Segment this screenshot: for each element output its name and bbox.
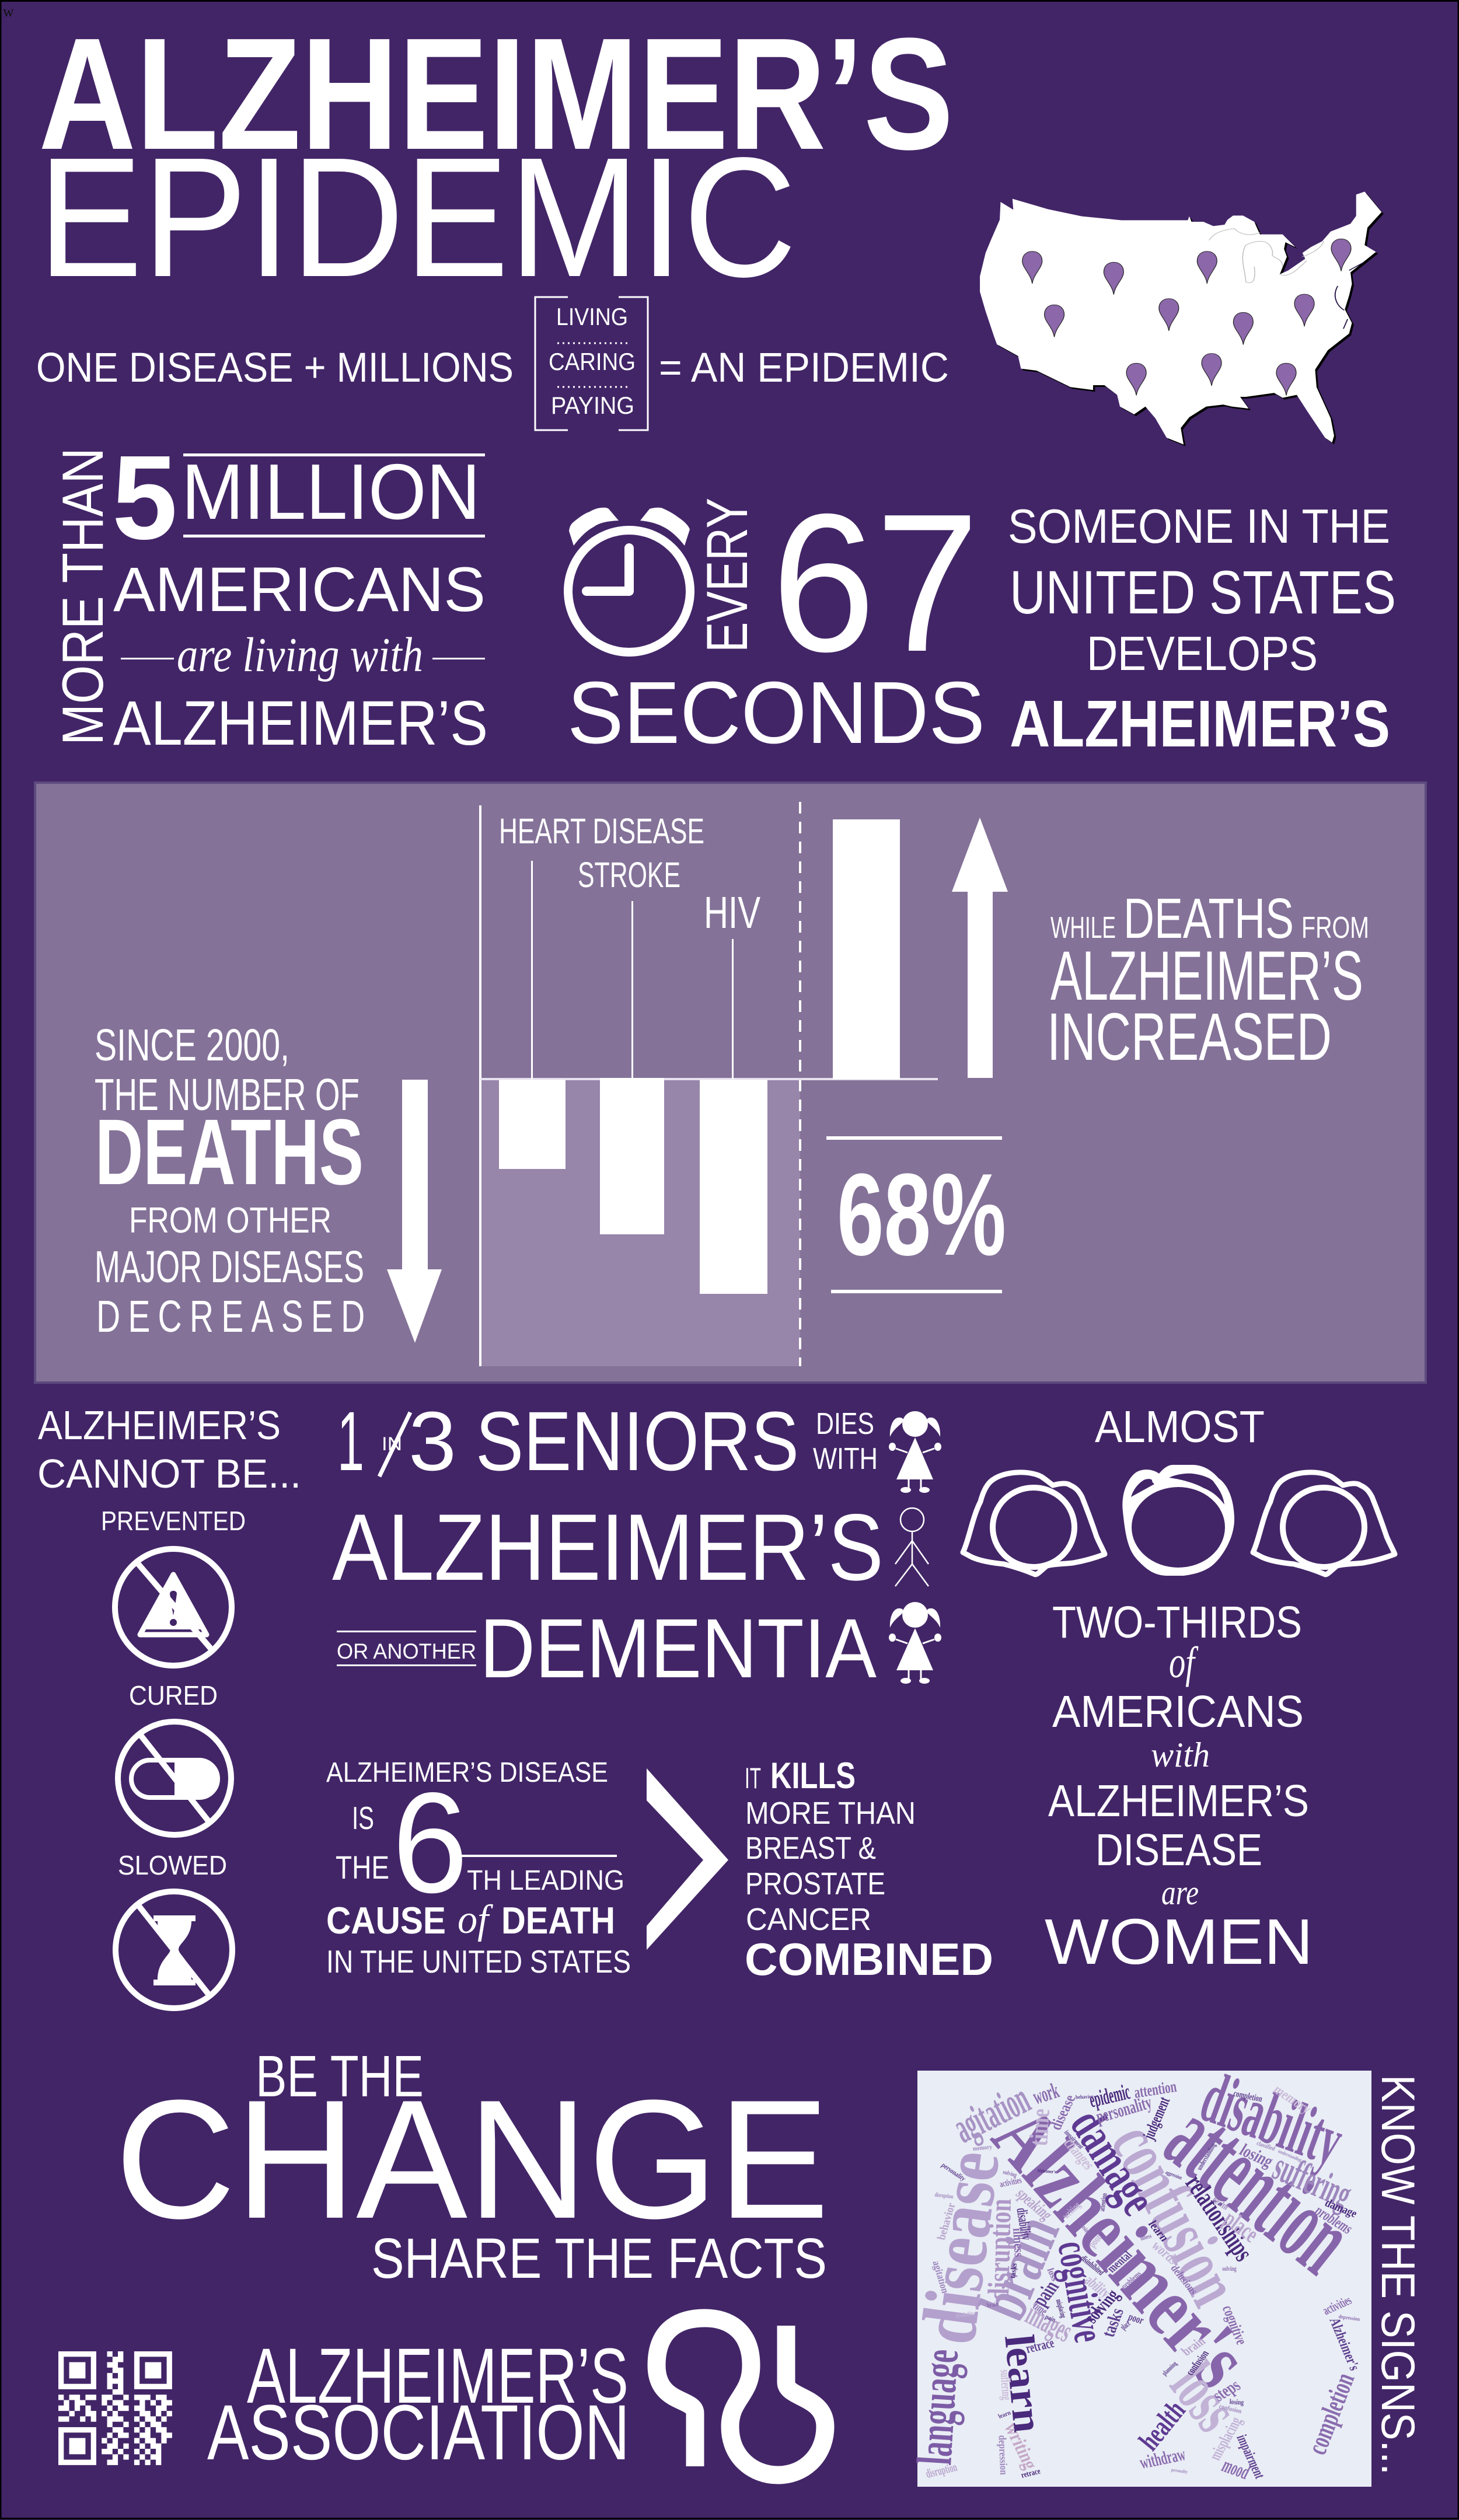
word cloud: small words: understanding xyxy=(1277,2148,1303,2163)
word cloud: elephant shape, large words: work xyxy=(1030,2078,1062,2110)
word cloud: small words: solving xyxy=(1080,2286,1124,2327)
word cloud: small words: behavior xyxy=(935,2202,958,2241)
panel: two-thirds are women: with xyxy=(1151,1736,1210,1774)
word cloud: elephant shape, large words: epidemic xyxy=(1087,2079,1132,2113)
word cloud: elephant shape, large words: Alzheimer's xyxy=(975,2088,1268,2405)
icon: girl figure xyxy=(889,1602,941,1684)
icon: woman head right xyxy=(1253,1472,1395,1575)
header panel xyxy=(36,5,1384,446)
word cloud: small words: delusions xyxy=(1076,2219,1093,2237)
text: deaths from other major diseases decreased: FROM OTHER xyxy=(129,1200,331,1241)
panel: be the change: BE THE xyxy=(256,2044,424,2109)
word cloud: small words: illness xyxy=(1010,2228,1027,2257)
word cloud: small words: retrace xyxy=(1020,2466,1042,2480)
word cloud: small words: loss xyxy=(1045,2267,1060,2282)
word cloud: small words: writing xyxy=(1000,2420,1042,2472)
text: deaths from other major diseases decreased: SINCE 2000, xyxy=(95,1020,289,1070)
word cloud: small words: speaking xyxy=(1012,2186,1056,2224)
word cloud: elephant shape, large words: images xyxy=(1020,2296,1078,2349)
word cloud: small words: writing xyxy=(1060,2200,1083,2221)
word cloud: small words: poor xyxy=(1085,2232,1105,2250)
text: while deaths from Alzheimer's increased: INCREASED xyxy=(1047,1000,1332,1074)
text: kills more than breast and prostate cancer combined: COMBINED xyxy=(745,1933,993,1985)
word cloud: small words: impairment xyxy=(1233,2433,1268,2480)
word cloud: small words: problems xyxy=(1119,2270,1143,2290)
word cloud: small words: Alzheimer's xyxy=(1037,2168,1056,2175)
text: w xyxy=(3,3,14,20)
word cloud: small words: losing xyxy=(1229,2397,1244,2406)
word cloud: small words: solving xyxy=(1222,2265,1237,2273)
word cloud: small words: words xyxy=(1148,2238,1182,2267)
icon: woman head centre xyxy=(1122,1465,1234,1576)
panel: be the change: CHANGE xyxy=(115,2065,829,2254)
word cloud: elephant shape, large words: damage xyxy=(1059,2099,1167,2225)
panel: 1 in 3 seniors: OR ANOTHER xyxy=(337,1639,476,1663)
text: deaths from other major diseases decreased: MAJOR DISEASES xyxy=(95,1242,364,1292)
word cloud: elephant shape, large words: judgement xyxy=(1140,2094,1174,2142)
word cloud: small words: aggression xyxy=(1164,2170,1183,2181)
word cloud: small words: problems xyxy=(1311,2203,1356,2237)
stat: more than 5 million Americans: MILLION xyxy=(181,448,480,536)
word cloud: small words: confusion xyxy=(1218,2402,1243,2415)
equation: one disease plus millions equals an epidemic: = AN EPIDEMIC xyxy=(659,345,949,391)
panel: 1 in 3 seniors: DEMENTIA xyxy=(480,1601,877,1695)
word cloud: small words: personality xyxy=(940,2161,968,2183)
panel: be the change: SHARE THE FACTS xyxy=(371,2226,827,2290)
equation: one disease plus millions equals an epidemic: PAYING xyxy=(551,392,634,419)
icon: girl figure xyxy=(889,1411,941,1493)
word cloud: small words: disruption xyxy=(934,2191,954,2200)
word cloud: small words: classified xyxy=(1255,2140,1276,2152)
text: while deaths from Alzheimer's increased: DEATHS xyxy=(1123,886,1294,950)
word cloud: small words: agitation xyxy=(930,2260,951,2294)
word cloud: small words: poor xyxy=(1126,2311,1146,2327)
word cloud: small words: delusions xyxy=(1168,2263,1200,2296)
panel: 6th leading cause of death: ALZHEIMER’S DISEASE xyxy=(326,1757,608,1788)
word cloud: elephant shape, large words: agitation xyxy=(945,2074,1037,2152)
panel: two-thirds are women xyxy=(963,1402,1395,1978)
icon: no warning sign xyxy=(115,1549,232,1666)
word cloud panel xyxy=(905,2057,1375,2487)
bar chart: HIV xyxy=(704,888,760,938)
word cloud: small words: disruption xyxy=(924,2460,959,2480)
word cloud: elephant shape, large words: brain xyxy=(965,2205,1073,2330)
word cloud: elephant shape, large words: disruption xyxy=(982,2198,1018,2301)
word cloud: small words: time xyxy=(1030,2301,1050,2317)
stat: 68 percent xyxy=(826,1136,1006,1293)
panel: two-thirds are women: are xyxy=(1161,1873,1199,1912)
equation: one disease plus millions equals an epidemic: ONE DISEASE + MILLIONS xyxy=(36,345,514,391)
panel: two-thirds are women: ALMOST xyxy=(1095,1402,1265,1452)
word cloud: elephant shape, large words xyxy=(905,2057,1375,2466)
word cloud: elephant shape, large words: health xyxy=(1132,2394,1192,2456)
stat: every 67 seconds: ALZHEIMER’S xyxy=(1010,687,1390,760)
word cloud: small words: retrace xyxy=(1024,2335,1056,2356)
word cloud: small words: misplacing xyxy=(1205,2414,1245,2463)
word cloud: elephant shape, large words: attention xyxy=(1133,2078,1178,2102)
word cloud: small words: pain xyxy=(1027,2277,1064,2310)
panel: Alzheimer's cannot be prevented, cured, slowed: CANNOT BE... xyxy=(37,1451,301,1496)
icon: greater-than chevron xyxy=(647,1768,728,1950)
stat: more than 5 million Americans: ALZHEIMER’S xyxy=(113,687,488,758)
panel: 1 in 3 seniors: SENIORS xyxy=(476,1394,799,1488)
stat: more than 5 million Americans xyxy=(50,431,488,758)
word cloud: elephant shape, large words: suffering xyxy=(1267,2144,1358,2217)
word cloud: elephant shape, large words: loss xyxy=(1157,2350,1254,2444)
word cloud: small words: withdraw xyxy=(1137,2445,1188,2473)
Alzheimer's Association wordmark xyxy=(207,2333,630,2476)
word cloud: small words: brain xyxy=(986,2300,999,2309)
stat: every 67 seconds: SECONDS xyxy=(567,663,985,762)
panel: 6th leading cause of death xyxy=(326,1755,993,1985)
word cloud: small words: activities xyxy=(1320,2294,1355,2318)
bar chart: HEART DISEASE xyxy=(499,811,704,851)
arrow: up xyxy=(952,818,1008,1078)
word cloud: elephant shape, large words: time xyxy=(1024,2108,1055,2147)
text: while deaths from Alzheimer's increased: WHILE xyxy=(1050,911,1116,945)
word cloud: elephant shape, large words: confusion xyxy=(1096,2111,1255,2317)
text: kills more than breast and prostate cancer combined xyxy=(745,1755,993,1985)
word cloud: elephant shape, large words: language xyxy=(907,2348,969,2466)
text: kills more than breast and prostate cancer combined: KILLS xyxy=(770,1755,856,1796)
word cloud: small words: place xyxy=(1118,2319,1133,2332)
icon: stick figure xyxy=(895,1508,929,1586)
word cloud: small words: impairment xyxy=(1062,2128,1085,2150)
word cloud: small words: memory xyxy=(1270,2082,1315,2117)
Alzheimer's Association wordmark: ALZHEIMER’S xyxy=(247,2333,629,2420)
panel: Alzheimer's cannot be prevented, cured, slowed: PREVENTED xyxy=(101,1506,246,1536)
word cloud: small words: depression xyxy=(1338,2314,1360,2323)
word cloud: small words: tasks xyxy=(1008,2263,1018,2279)
panel: 1 in 3 seniors: WITH xyxy=(813,1442,878,1476)
panel: 1 in 3 seniors: 1 xyxy=(337,1394,364,1488)
stat: more than 5 million Americans: AMERICANS xyxy=(113,554,486,624)
word cloud: small words: learn xyxy=(997,2409,1012,2420)
word cloud: small words: confusion xyxy=(1184,2348,1212,2378)
word cloud: small words: ability xyxy=(1081,2272,1115,2301)
bar chart xyxy=(479,802,938,1366)
title xyxy=(38,5,954,312)
word cloud: small words: attention xyxy=(1097,2193,1109,2212)
panel: deaths chart xyxy=(35,783,1426,1383)
title: ALZHEIMER’S xyxy=(39,5,954,183)
text: deaths from other major diseases decreased: THE NUMBER OF xyxy=(95,1070,359,1120)
text: kills more than breast and prostate cancer combined: CANCER xyxy=(746,1902,871,1937)
word cloud: elephant shape, large words: personality xyxy=(1094,2091,1154,2127)
equation: one disease plus millions equals an epidemic: CARING xyxy=(549,348,636,375)
panel: 6th leading cause of death: CAUSE xyxy=(326,1899,446,1942)
QR code xyxy=(58,2354,172,2462)
icon: alarm clock xyxy=(568,508,690,652)
text: kills more than breast and prostate cancer combined: IT xyxy=(745,1762,761,1795)
word cloud: small words: activities xyxy=(999,2175,1023,2189)
panel: 1 in 3 seniors xyxy=(332,1394,941,1695)
word cloud: elephant shape, large words: place xyxy=(1219,2205,1263,2248)
panel: Alzheimer's cannot be prevented, cured, slowed: ALZHEIMER’S xyxy=(38,1402,281,1448)
word cloud: small words: cognitive xyxy=(1219,2303,1251,2347)
text: kills more than breast and prostate cancer combined: PROSTATE xyxy=(745,1866,885,1901)
text: kills more than breast and prostate cancer combined: BREAST & xyxy=(745,1831,876,1866)
word cloud: small words: disability xyxy=(955,2309,976,2320)
word cloud: small words: health xyxy=(1210,2196,1231,2212)
text: deaths from other major diseases decreased xyxy=(95,1020,365,1342)
word cloud: small words: tasks xyxy=(1098,2306,1128,2339)
panel: 6th leading cause of death: of xyxy=(458,1897,493,1942)
word cloud: small words: changes xyxy=(1060,2135,1099,2172)
stat: 68 percent: 68% xyxy=(837,1150,1006,1280)
map of the United States with pins xyxy=(980,191,1384,446)
word cloud: small words: mental xyxy=(1104,2249,1135,2275)
word cloud: small words: steps xyxy=(1209,2376,1245,2405)
text: deaths from other major diseases decreased: DECREASED xyxy=(96,1292,365,1342)
panel: two-thirds are women: ALZHEIMER’S xyxy=(1048,1776,1309,1826)
panel: Alzheimer's cannot be prevented, cured, slowed xyxy=(37,1402,301,2008)
title: EPIDEMIC xyxy=(38,122,797,312)
word cloud: elephant shape, large words: cognitive xyxy=(1048,2238,1114,2346)
icon: woman head left xyxy=(963,1472,1105,1575)
word cloud: elephant shape, large words: disease xyxy=(905,2146,1017,2349)
word cloud: elephant shape, large words: completion xyxy=(1301,2369,1360,2459)
panel: 6th leading cause of death: DEATH xyxy=(501,1899,615,1942)
panel: two-thirds are women: AMERICANS xyxy=(1052,1687,1304,1737)
panel: two-thirds are women: DISEASE xyxy=(1095,1825,1262,1875)
word cloud: small words xyxy=(924,2082,1363,2484)
panel: two-thirds are women: WOMEN xyxy=(1045,1906,1313,1978)
word cloud: small words: personality xyxy=(1171,2467,1188,2474)
word cloud: small words: disinhibited xyxy=(1078,2254,1107,2277)
word cloud: small words: losing xyxy=(1236,2141,1277,2171)
panel: 6th leading cause of death: THE xyxy=(336,1849,389,1886)
word cloud: small words: planning xyxy=(1160,2360,1179,2377)
stat: every 67 seconds: 67 xyxy=(772,473,979,693)
panel: Alzheimer's cannot be prevented, cured, slowed: SLOWED xyxy=(118,1850,227,1880)
word cloud: small words: completion xyxy=(1233,2088,1264,2104)
word cloud: elephant shape, large words: relationships xyxy=(1179,2169,1259,2267)
panel: 6th leading cause of death: 6 xyxy=(392,1762,468,1922)
word cloud: small words: damage xyxy=(1322,2196,1360,2220)
stat: every 67 seconds xyxy=(567,473,1396,762)
word cloud: small words: understanding xyxy=(1195,2142,1218,2171)
equation: one disease plus millions equals an epidemic xyxy=(36,297,949,430)
word cloud: small words: suffering xyxy=(997,2369,1014,2400)
word cloud: small words: mood xyxy=(1218,2454,1254,2484)
panel: 1 in 3 seniors: ALZHEIMER’S xyxy=(332,1495,884,1600)
stat: every 67 seconds: DEVELOPS xyxy=(1087,626,1318,680)
word cloud: small words: depression xyxy=(996,2435,1010,2475)
equation: one disease plus millions equals an epidemic: LIVING xyxy=(556,303,628,330)
bar chart: STROKE xyxy=(578,855,680,895)
panel: 1 in 3 seniors: IN xyxy=(382,1433,402,1454)
word cloud: small words: illness xyxy=(1139,2232,1153,2242)
text: while deaths from Alzheimer's increased: FROM xyxy=(1301,911,1369,945)
vertical label: know the signs: KNOW THE SIGNS... xyxy=(1371,2075,1424,2475)
stat: every 67 seconds: SOMEONE IN THE xyxy=(1008,499,1390,553)
panel: 1 in 3 seniors: 3 xyxy=(409,1394,456,1488)
word cloud: small words: behavior xyxy=(1076,2094,1094,2100)
stat: more than 5 million Americans: are living with xyxy=(177,628,423,682)
icon: Alzheimer's Association logo xyxy=(657,2318,825,2475)
panel: two-thirds are women: TWO-THIRDS xyxy=(1052,1597,1302,1648)
text: deaths from other major diseases decreased: DEATHS xyxy=(95,1100,364,1204)
panel: two-thirds are women: of xyxy=(1169,1638,1199,1687)
icon: no hourglass xyxy=(116,1891,232,2008)
word cloud: small words: brain xyxy=(1178,2334,1209,2359)
text: while deaths from Alzheimer's increased xyxy=(1047,886,1369,1074)
stat: more than 5 million Americans: MORE THAN xyxy=(50,448,115,745)
panel: 6th leading cause of death: TH LEADING xyxy=(467,1865,624,1896)
icon: no pill xyxy=(118,1722,231,1835)
panel: 6th leading cause of death: IS xyxy=(352,1800,374,1836)
stat: more than 5 million Americans: 5 xyxy=(112,431,177,564)
arrow: down xyxy=(387,1080,442,1343)
word cloud: small words: disability xyxy=(1013,2207,1034,2241)
panel: 6th leading cause of death: IN THE UNITED STATES xyxy=(326,1943,631,1980)
Alzheimer's Association wordmark: ASSOCIATION xyxy=(207,2389,630,2476)
word cloud: elephant shape, large words: learn xyxy=(996,2333,1052,2435)
panel: 1 in 3 seniors: DIES xyxy=(816,1407,874,1441)
word cloud: small words: pain xyxy=(1043,2313,1057,2323)
panel: Alzheimer's cannot be prevented, cured, slowed: CURED xyxy=(129,1680,218,1711)
word cloud: small words: solving xyxy=(1002,2169,1018,2179)
text: kills more than breast and prostate cancer combined: MORE THAN xyxy=(745,1796,916,1831)
word cloud: small words: Alzheimer's xyxy=(1326,2316,1363,2372)
word cloud: small words: memory xyxy=(972,2143,993,2152)
word cloud: small words: learn xyxy=(1145,2219,1172,2244)
word cloud: small words: misplacing xyxy=(1054,2298,1068,2319)
stat: every 67 seconds: EVERY xyxy=(694,498,759,652)
word cloud: small words: disease xyxy=(1046,2093,1079,2132)
